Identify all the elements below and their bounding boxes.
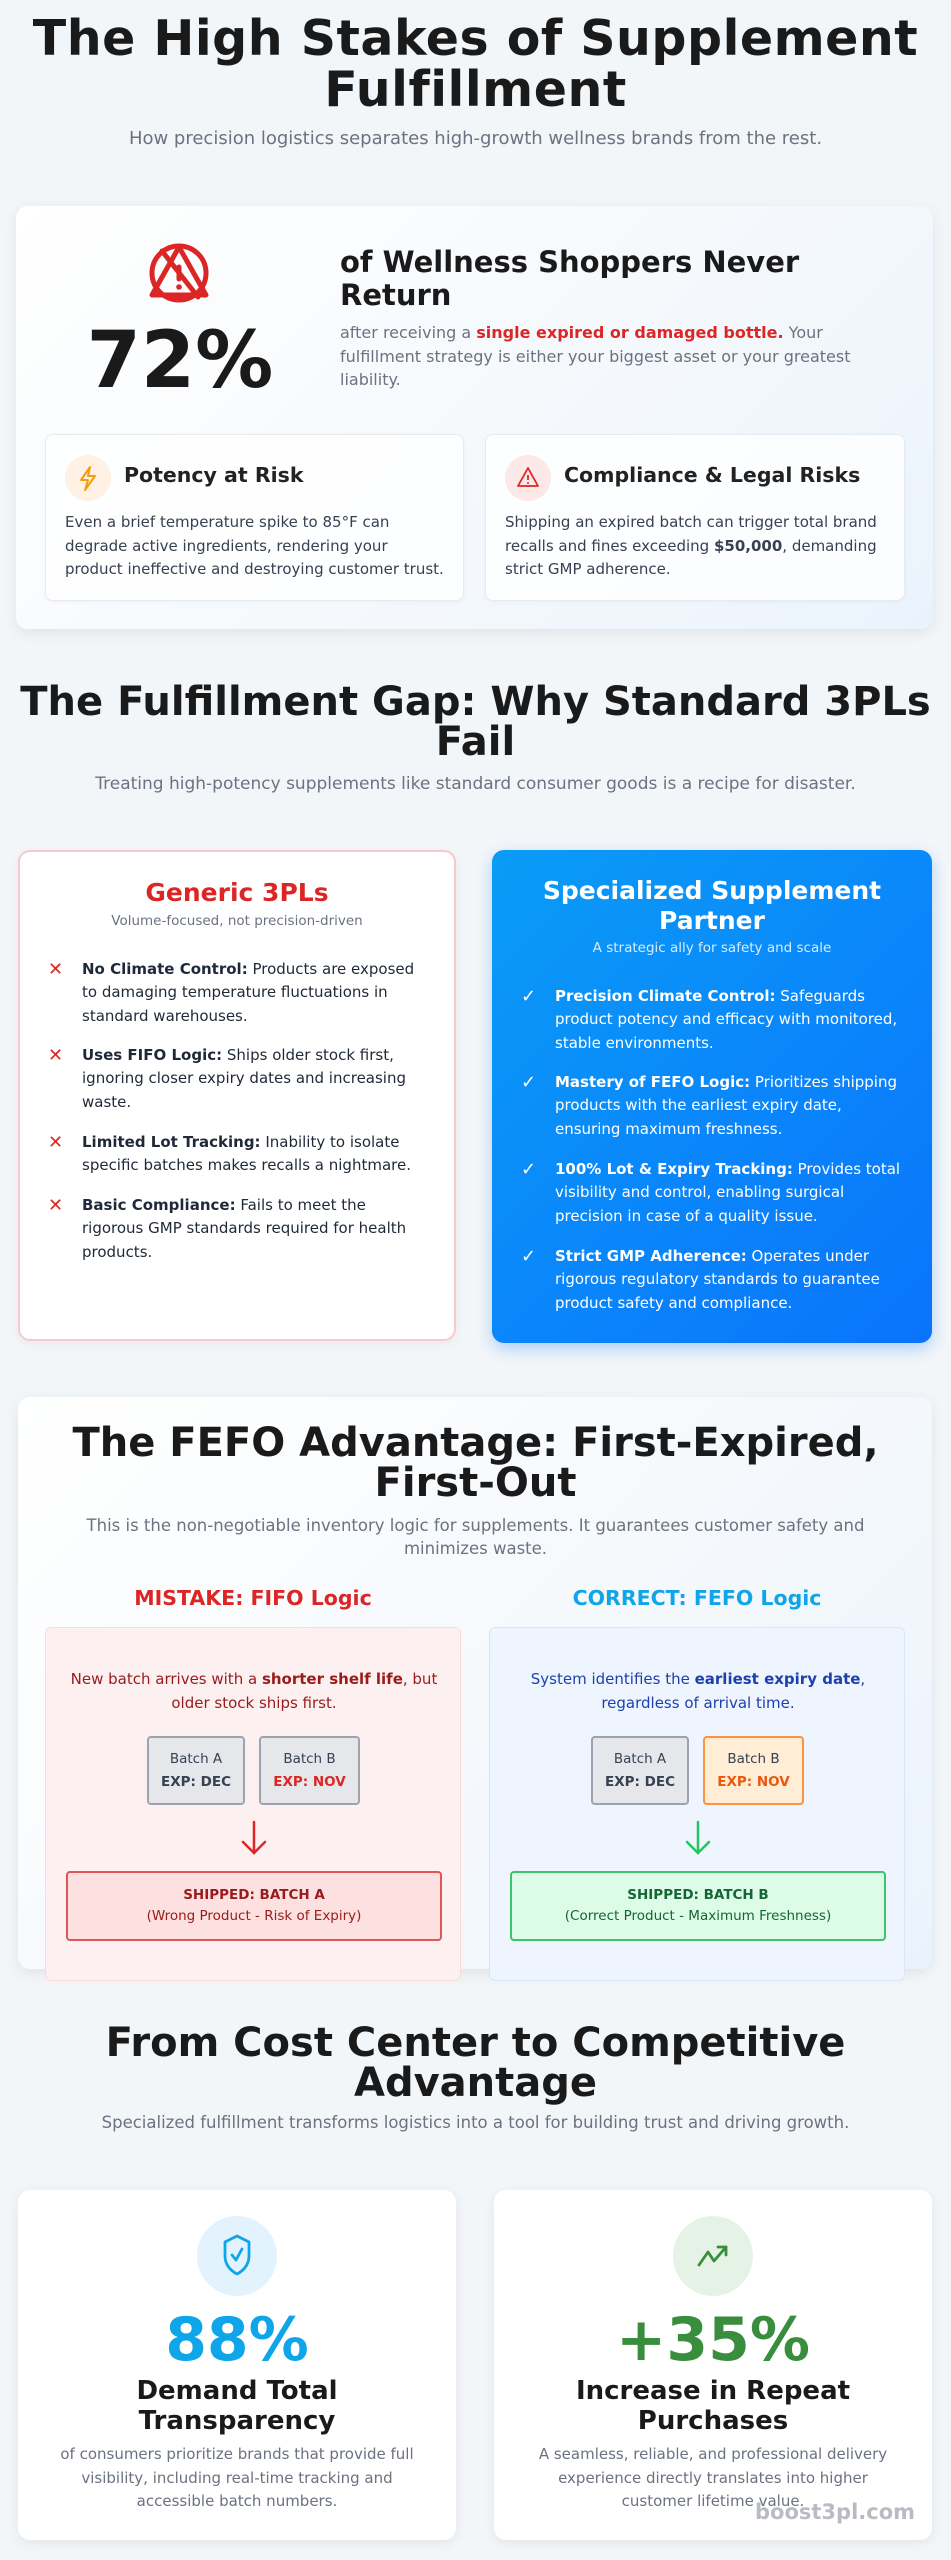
subtitle: How precision logistics separates high-growth wellness brands from the rest. — [129, 128, 822, 149]
list item: Limited Lot Tracking: Inability to isolate specific batches makes recalls a nightmare. — [82, 1133, 411, 1174]
text: New batch arrives with a shorter shelf life, but older stock ships first. — [71, 1670, 437, 1712]
stat: 72%: 72% — [87, 316, 273, 406]
panel: 88% stat — [18, 2190, 456, 2540]
text: Shipping an expired batch can trigger total brand recalls and fines exceeding $50,000, demanding strict GMP adherence. — [505, 513, 877, 578]
list item: Precision Climate Control: Safeguards product potency and efficacy with monitored, stable environments. — [555, 987, 897, 1052]
text: System identifies the earliest expiry date, regardless of arrival time. — [531, 1670, 865, 1712]
arrow — [242, 1820, 266, 1855]
heading: correct FEFO: CORRECT: FEFO Logic — [573, 1586, 821, 1610]
list item: No Climate Control: Products are exposed to damaging temperature fluctuations in standard warehouses. — [82, 960, 414, 1025]
shipped box: (Wrong Product - Risk of Expiry) — [147, 1908, 361, 1924]
heading: fulfillment gap: Fail — [436, 719, 515, 765]
subheading: A strategic ally for safety and scale — [593, 940, 831, 956]
batch A: Batch A — [170, 1751, 222, 1767]
list item: 100% Lot & Expiry Tracking: Provides total visibility and control, enabling surgical precision in case of a quality issue. — [555, 1160, 900, 1225]
title: Fulfillment — [324, 61, 627, 118]
list item: ✓ — [521, 1246, 536, 1267]
panel: stakes card — [16, 206, 933, 629]
heading: Partner — [659, 906, 765, 935]
icon: alert — [505, 455, 551, 501]
panel: 35% stat — [494, 2190, 932, 2540]
heading: fulfillment gap — [20, 679, 931, 765]
list item: ✕ — [48, 1195, 63, 1216]
shipped box: SHIPPED: BATCH B — [627, 1887, 769, 1903]
heading: Increase in Repeat — [576, 2376, 850, 2406]
title — [33, 10, 918, 118]
list item: ✓ — [521, 1072, 536, 1093]
subtitle: Treating high-potency supplements like standard consumer goods is a recipe for disaster. — [95, 774, 856, 794]
text: Even a brief temperature spike to 85°F can degrade active ingredients, rendering your product ineffective and destroying customer trust. — [65, 513, 444, 578]
heading: Potency at Risk — [124, 463, 303, 487]
number: +35% — [616, 2305, 810, 2375]
subtitle: This is the non-negotiable inventory logic for supplements. It guarantees customer safety and minimizes waste. — [87, 1516, 864, 1558]
list item: ✕ — [48, 1045, 63, 1066]
heading: cost center: Advantage — [354, 2060, 597, 2106]
text: of consumers prioritize brands that provide full visibility, including real-time tracking and accessible batch numbers. — [60, 2445, 414, 2510]
list item: Mastery of FEFO Logic: Prioritizes shipping products with the earliest expiry date, ensuring maximum freshness. — [555, 1073, 897, 1138]
list item: Strict GMP Adherence: Operates under rigorous regulatory standards to guarantee product safety and compliance. — [555, 1247, 880, 1312]
subheading: Volume-focused, not precision-driven — [111, 913, 363, 929]
icon: warning — [150, 244, 208, 302]
panel: FEFO card background — [18, 1397, 932, 1969]
heading: shoppers never return: of Wellness Shoppers Never Return — [340, 245, 799, 312]
heading: FEFO advantage: First-Out — [375, 1460, 576, 1506]
list item: Uses FIFO Logic: Ships older stock first, ignoring closer expiry dates and increasing waste. — [82, 1046, 406, 1111]
batch A: EXP: DEC — [161, 1774, 231, 1790]
list item: ✕ — [48, 1132, 63, 1153]
text: explanation: after receiving a single expired or damaged bottle. Your fulfillment strategy is either your biggest asset or your greatest liability. — [340, 323, 850, 389]
number: 88% — [165, 2305, 309, 2375]
panel: compliance — [485, 434, 905, 601]
text: A seamless, reliable, and professional delivery experience directly translates into higher customer lifetime value. — [539, 2445, 887, 2510]
panel: FIFO diagram — [45, 1627, 461, 1981]
icon: lightning — [65, 455, 111, 501]
batch B: Batch B — [283, 1751, 336, 1767]
heading: Generic 3PLs — [145, 878, 329, 907]
icon: shield — [197, 2216, 277, 2296]
title: The High Stakes of Supplement — [33, 10, 918, 67]
batch B — [703, 1736, 804, 1805]
panel: FEFO diagram — [489, 1627, 905, 1981]
shipped box: SHIPPED: BATCH A — [183, 1887, 325, 1903]
list item: ✕ — [48, 959, 63, 980]
batch A: Batch A — [614, 1751, 666, 1767]
heading: FEFO advantage — [72, 1420, 879, 1506]
panel: specialized partner — [492, 850, 932, 1343]
arrow — [686, 1820, 710, 1855]
batch A — [591, 1736, 689, 1805]
list item: Basic Compliance: Fails to meet the rigorous GMP standards required for health products. — [82, 1196, 406, 1261]
panel: potency at risk — [45, 434, 464, 601]
watermark: boost3pl.com — [755, 2500, 915, 2524]
shipped box — [510, 1871, 886, 1941]
shipped box — [66, 1871, 442, 1941]
heading: FEFO advantage: The FEFO Advantage: First-Expired, — [72, 1420, 879, 1466]
heading: fulfillment gap: The Fulfillment Gap: Why Standard 3PLs — [20, 679, 931, 725]
heading: cost center: From Cost Center to Competitive — [106, 2020, 845, 2066]
batch B: EXP: NOV — [717, 1774, 790, 1790]
panel: generic 3PLs — [18, 850, 456, 1341]
heading: Specialized Supplement — [543, 876, 881, 905]
heading: Transparency — [139, 2406, 335, 2436]
list item: ✓ — [521, 986, 536, 1007]
list item: ✓ — [521, 1159, 536, 1180]
heading: Purchases — [638, 2406, 788, 2436]
heading — [136, 2376, 338, 2436]
batch B: EXP: NOV — [273, 1774, 346, 1790]
icon: trend up — [673, 2216, 753, 2296]
batch B — [259, 1736, 360, 1805]
heading: Compliance & Legal Risks — [564, 463, 860, 487]
heading: mistake FIFO: MISTAKE: FIFO Logic — [134, 1586, 372, 1610]
batch B: Batch B — [727, 1751, 780, 1767]
heading — [543, 876, 881, 935]
heading: Demand Total — [136, 2376, 338, 2406]
batch A: EXP: DEC — [605, 1774, 675, 1790]
batch A — [147, 1736, 245, 1805]
heading — [576, 2376, 850, 2436]
heading: cost center — [106, 2020, 845, 2106]
subtitle: Specialized fulfillment transforms logistics into a tool for building trust and driving growth. — [102, 2113, 849, 2132]
shipped box: (Correct Product - Maximum Freshness) — [565, 1908, 831, 1924]
